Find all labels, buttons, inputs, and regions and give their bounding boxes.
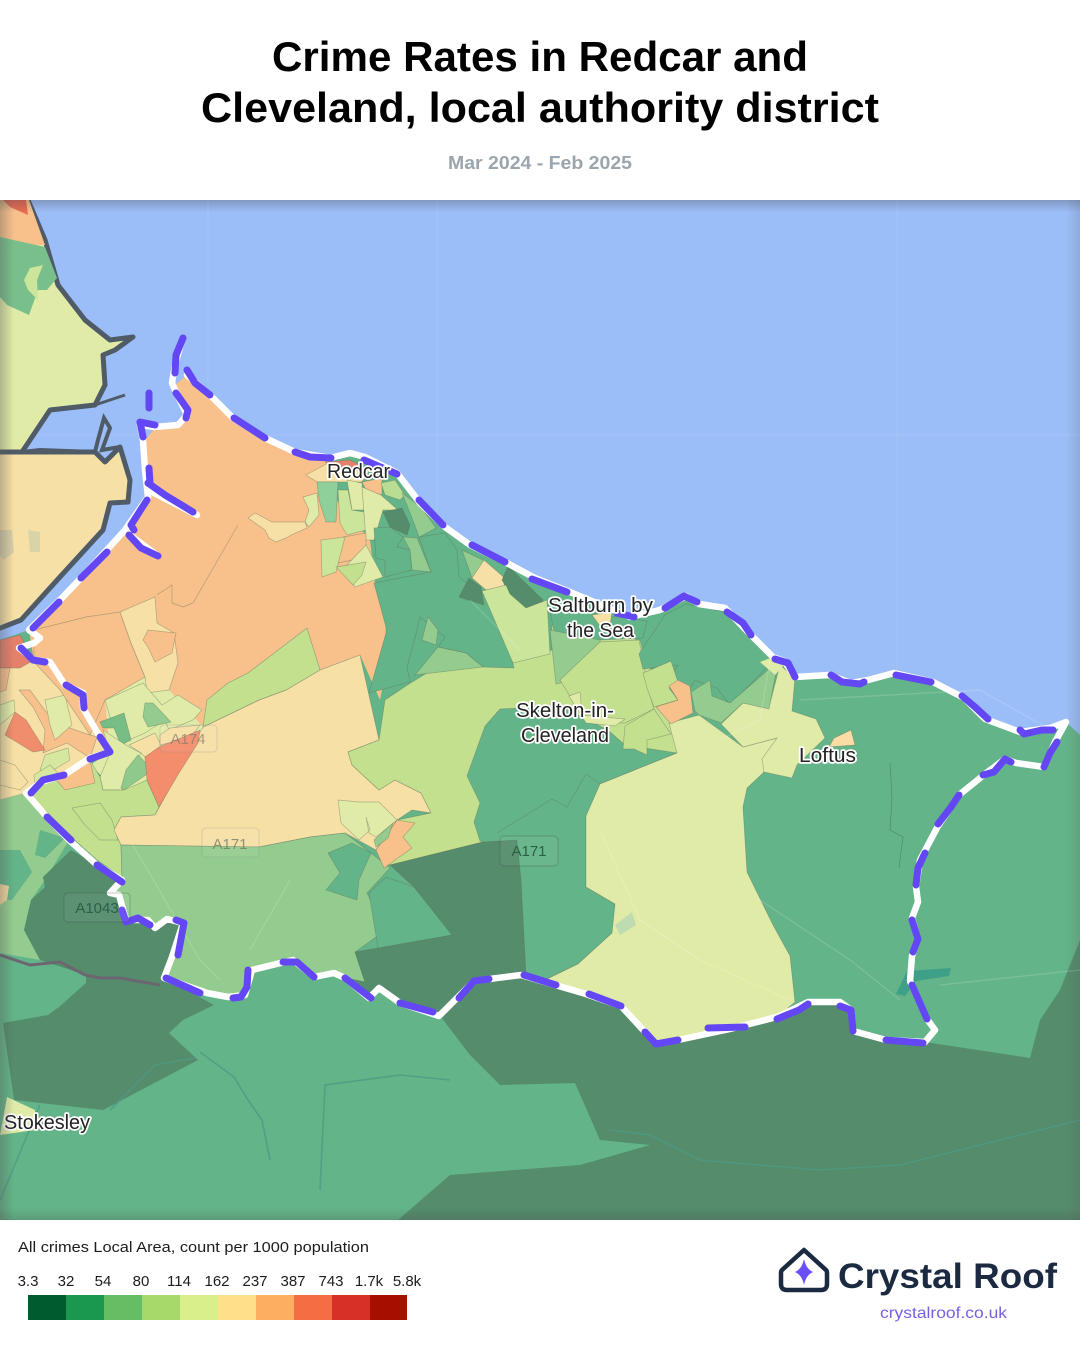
road label: A174: A174 <box>170 731 206 748</box>
sea <box>0 200 1080 735</box>
legend values: 5.8k <box>393 1273 422 1290</box>
label: Saltburn by the Sea: the Sea <box>567 620 635 642</box>
title <box>201 33 879 131</box>
legend values: 237 <box>242 1273 268 1290</box>
legend values: 54 <box>95 1273 111 1290</box>
icon: house with star <box>781 1250 827 1290</box>
town wards west of boundary <box>0 660 110 800</box>
legend values: 1.7k <box>355 1273 384 1290</box>
pale yellow A171 area <box>114 655 431 850</box>
main land base <box>0 375 1080 1220</box>
wards east of boundary <box>105 683 202 740</box>
legend values: 32 <box>58 1273 74 1290</box>
label: Skelton-in-Cleveland <box>516 700 614 747</box>
label: Redcar: Redcar <box>327 461 390 483</box>
legend colour scale <box>28 1295 407 1320</box>
legend values: 162 <box>204 1273 230 1290</box>
road label: A1043 <box>64 893 130 922</box>
orange wards <box>34 612 145 735</box>
Skelton medium green <box>467 706 677 979</box>
title: Cleveland, local authority district <box>201 84 879 131</box>
central light green <box>348 625 680 865</box>
legend values <box>18 1273 422 1290</box>
label: Skelton-in-Cleveland: Skelton-in- <box>516 700 614 722</box>
label: Saltburn by the Sea <box>548 595 653 642</box>
place labels <box>4 461 856 1134</box>
road label: A174 <box>160 725 217 752</box>
south light green <box>110 833 390 997</box>
label: Stokesley: Stokesley <box>4 1112 90 1134</box>
underlay for wards east of boundary <box>90 677 203 807</box>
legend values: 80 <box>133 1273 149 1290</box>
legend values: 743 <box>318 1273 344 1290</box>
legend values: 114 <box>167 1273 191 1290</box>
road label: A171 west <box>202 828 259 857</box>
title: Crime Rates in Redcar and <box>272 33 808 80</box>
Redcar town cells <box>306 463 370 482</box>
south-west green and dark green areas <box>0 793 1080 1220</box>
map panel <box>0 200 1080 1220</box>
label: Loftus: Loftus <box>799 745 856 767</box>
ward cells <box>0 460 855 1044</box>
land north of the Tees <box>0 200 133 632</box>
subtitle: date range: Mar 2024 - Feb 2025 <box>448 153 632 173</box>
orange area: Teesport and Wilton <box>29 375 388 745</box>
legend title: All crimes Local Area, count per 1000 population <box>18 1239 369 1256</box>
east yellow-green <box>547 715 795 1044</box>
legend <box>18 1239 422 1320</box>
legend values: 3.3 <box>18 1273 38 1290</box>
wordmark: Crystal Roof <box>838 1257 1057 1296</box>
map edge shadows <box>0 200 1080 1220</box>
road label: A171 east: A171 <box>511 843 547 860</box>
label: Saltburn by the Sea: Saltburn by <box>548 595 653 617</box>
rivers and roads <box>0 600 1080 1200</box>
logo: Crystal Roof <box>781 1250 1057 1322</box>
Saltburn cells <box>482 585 550 663</box>
south dark green centre <box>345 840 526 1017</box>
Loftus area <box>721 665 825 778</box>
road label: A1043: A1043 <box>75 900 119 917</box>
label: Skelton-in-Cleveland: Cleveland <box>521 725 609 747</box>
road label: A171 west: A171 <box>212 836 248 853</box>
road label: A171 east <box>500 836 558 866</box>
website: crystalroof.co.uk <box>880 1305 1008 1322</box>
legend values: 387 <box>280 1273 306 1290</box>
district boundary dashed line <box>19 338 1066 1044</box>
